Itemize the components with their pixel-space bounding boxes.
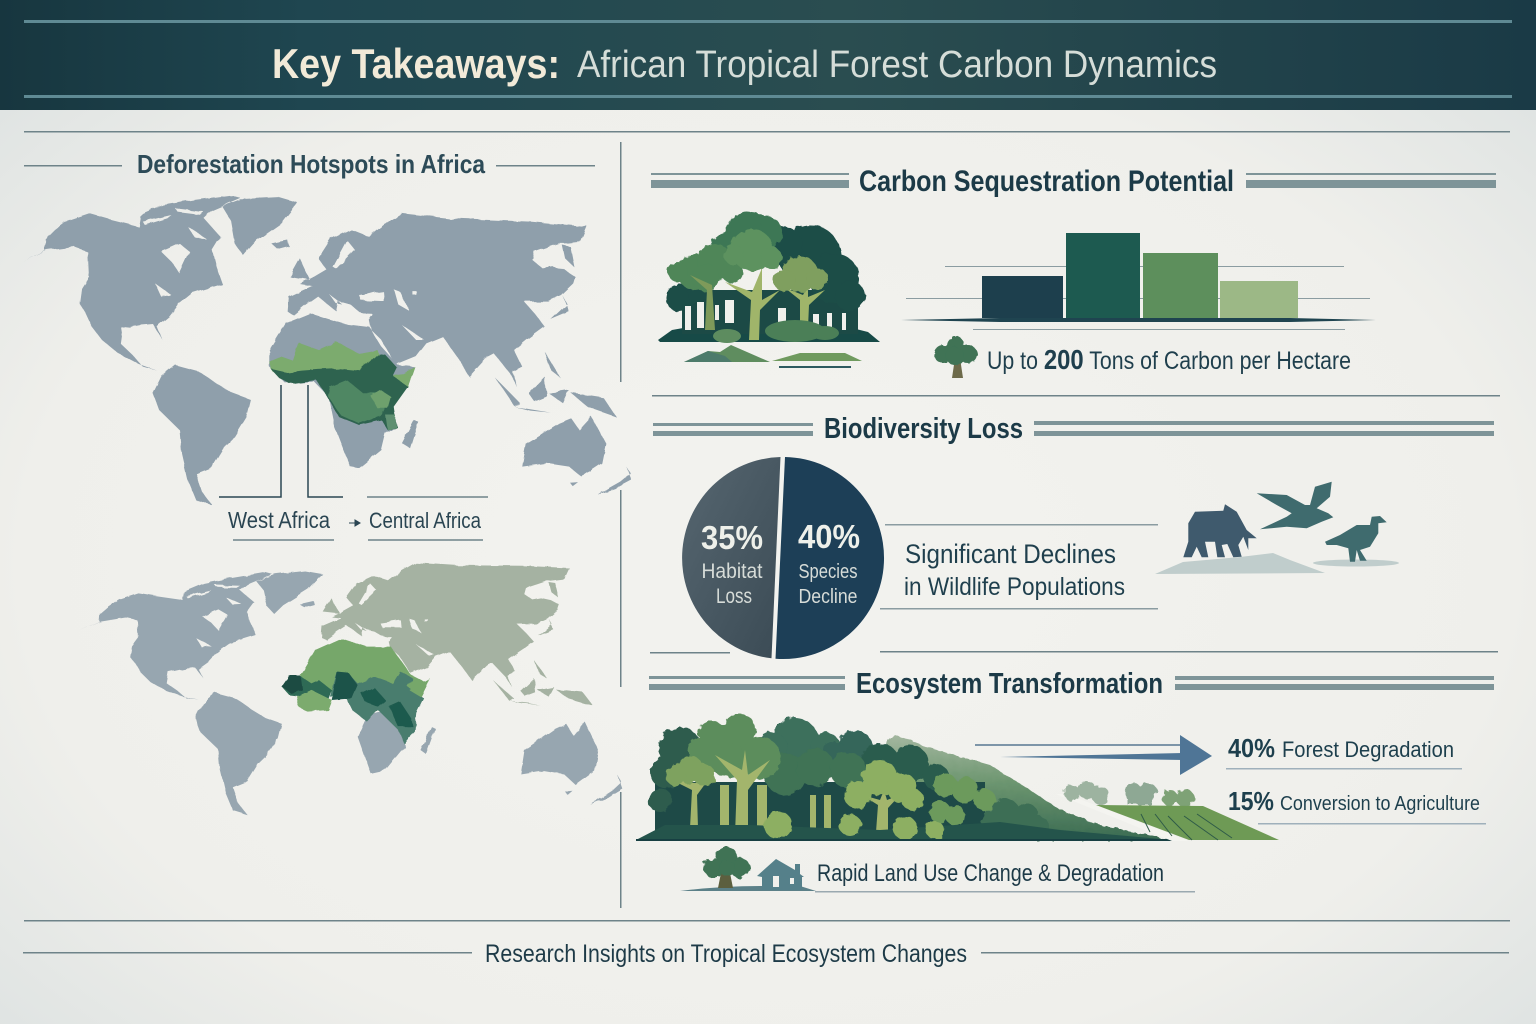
caption: land use change: Rapid Land Use Change & Degradation	[817, 860, 1164, 887]
world map: upper	[22, 195, 632, 505]
icon: ground mound	[1155, 553, 1325, 574]
stat: forest degradation: 40%	[1228, 733, 1275, 763]
stat: conversion to agriculture	[1228, 786, 1486, 824]
wildlife decline statement: in Wildlife Populations	[904, 573, 1125, 601]
text: 35 percent: Habitat	[702, 560, 763, 583]
heading: biodiversity loss	[653, 413, 1494, 445]
footer: Research Insights on Tropical Ecosystem Changes	[485, 940, 967, 968]
icon: elephant	[1183, 504, 1257, 557]
label: west africa: West Africa	[228, 507, 330, 533]
stat: forest degradation	[1226, 733, 1462, 770]
callout leader lines	[219, 385, 488, 540]
stat: conversion to agriculture: 15%	[1228, 786, 1274, 816]
arrow: west to central	[349, 520, 360, 526]
hotspot: lighter patches	[328, 380, 388, 423]
hotspot: forest band	[271, 355, 408, 430]
text: 40 percent: Decline	[798, 586, 858, 608]
white path	[1056, 794, 1189, 841]
icon: small tree	[934, 336, 977, 378]
hotspot: savanna band	[269, 342, 415, 387]
heading: carbon sequestration: Carbon Sequestration Potential	[859, 165, 1234, 198]
wildlife decline statement: Significant Declines	[905, 539, 1116, 569]
header band	[0, 0, 1536, 110]
title: African Tropical Forest Carbon Dynamics	[577, 44, 1217, 86]
wildlife decline statement	[880, 524, 1158, 610]
farmland	[1096, 805, 1279, 840]
heading: deforestation hotspots: Deforestation Hotspots in Africa	[137, 149, 485, 179]
africa regions: lower	[282, 638, 435, 773]
text: 40 percent: Species	[798, 561, 858, 583]
icon: ground bird	[1313, 516, 1399, 566]
canopy layers	[636, 714, 1172, 841]
stat: carbon per hectare: Up to 200 Tons of Carbon per Hectare	[987, 344, 1351, 375]
panel: carbon sequestration	[651, 165, 1496, 378]
bar 3	[1143, 253, 1218, 318]
text: 35 percent: Loss	[716, 585, 752, 608]
slice: habitat loss	[682, 457, 780, 658]
distant trees	[1064, 781, 1194, 807]
arrow: transformation	[975, 735, 1212, 775]
stat: forest degradation: Forest Degradation	[1282, 737, 1454, 762]
bar 1	[982, 276, 1063, 318]
icon: forest cluster	[658, 211, 880, 368]
icon: tree and house	[680, 847, 816, 891]
panel: ecosystem transformation	[636, 668, 1494, 892]
hills beneath forest	[684, 345, 862, 368]
pie chart	[682, 457, 884, 659]
label: central africa: Central Africa	[369, 508, 482, 533]
text: 40 percent: 40%	[798, 518, 860, 555]
bar chart	[901, 233, 1376, 330]
text: 35 percent	[701, 519, 763, 608]
world map: lower	[80, 558, 622, 815]
stat: conversion to agriculture: Conversion to Agriculture	[1280, 793, 1480, 815]
heading: ecosystem transformation: Ecosystem Transformation	[856, 668, 1163, 700]
bar 2	[1066, 233, 1140, 318]
icon: flying bird	[1257, 482, 1333, 529]
faded hill	[880, 735, 1172, 840]
heading: biodiversity loss: Biodiversity Loss	[824, 413, 1023, 445]
panel: biodiversity loss	[653, 413, 1494, 659]
text: 35 percent: 35%	[701, 519, 763, 556]
slice: species decline	[776, 457, 884, 659]
text: 40 percent	[798, 518, 860, 608]
title: Key Takeaways:	[272, 40, 560, 87]
heading: ecosystem transformation	[649, 668, 1494, 700]
layout rules	[24, 131, 1510, 908]
panel: deforestation hotspots	[22, 149, 632, 815]
bar 4	[1220, 281, 1298, 318]
heading: carbon sequestration	[651, 165, 1496, 198]
title	[272, 40, 1217, 87]
illustration: forest to farmland	[636, 714, 1279, 841]
